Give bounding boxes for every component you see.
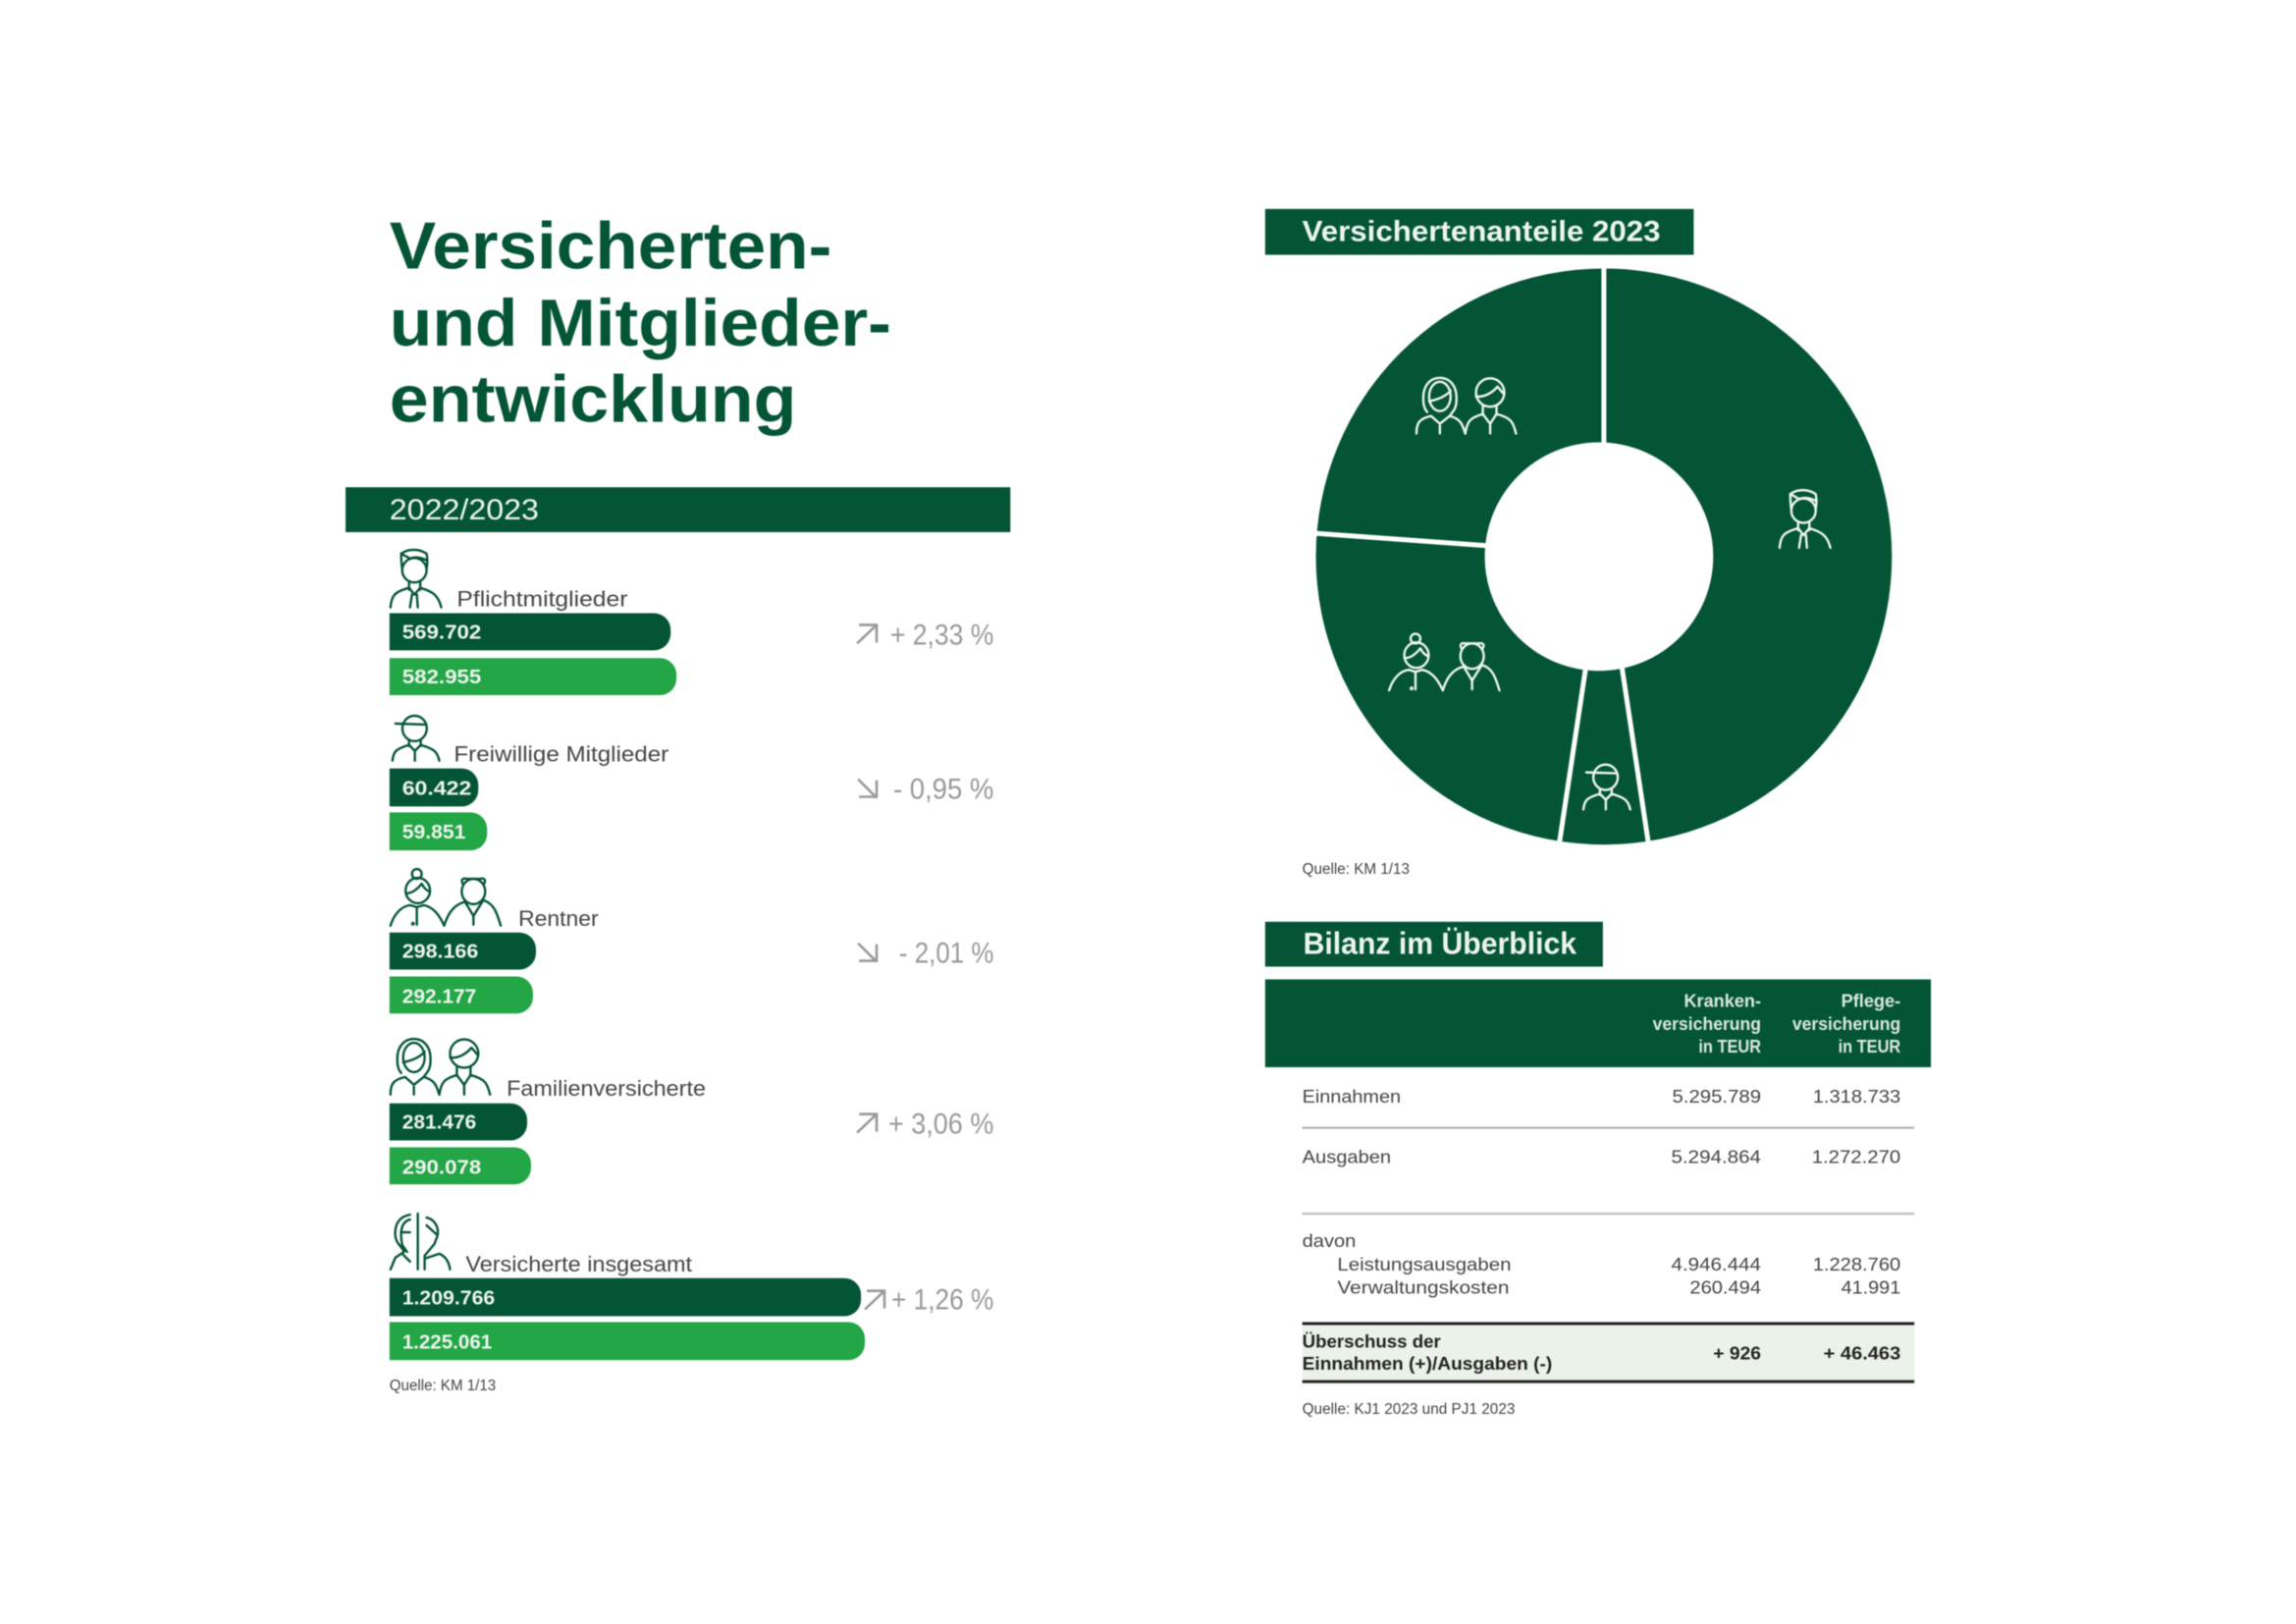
panel: Freiwillige Mitglieder: 59.851 <box>402 822 465 843</box>
table: balance overview <box>1265 979 1931 1381</box>
row: Einnahmen: 1.318.733 <box>1813 1087 1900 1108</box>
row: davon: 41.991 <box>1842 1278 1900 1299</box>
row: Ausgaben: 1.272.270 <box>1812 1147 1900 1167</box>
panel: Freiwillige Mitglieder <box>390 716 993 850</box>
icon: pensioners in donut <box>1389 633 1500 690</box>
row: Einnahmen: Einnahmen <box>1303 1087 1401 1108</box>
icon: family insured in donut <box>1416 378 1516 434</box>
icon: compulsory member in donut <box>1780 490 1831 548</box>
source note left: Quelle: KM 1/13 <box>390 1378 496 1394</box>
row: Überschuss <box>1303 1324 1914 1381</box>
row: Ausgaben <box>1303 1147 1900 1167</box>
panel: Rentner: - 2,01 % <box>899 938 993 970</box>
row: davon: 260.494 <box>1689 1278 1761 1299</box>
table header <box>1265 979 1931 1067</box>
panel: Pflichtmitglieder: 569.702 <box>402 622 481 643</box>
icon: pensioners <box>391 869 501 926</box>
panel: Versicherte insgesamt: 1.209.766 <box>402 1288 495 1310</box>
source note donut: Quelle: KM 1/13 <box>1303 861 1410 878</box>
row: davon: davon <box>1303 1231 1356 1252</box>
icon: compulsory member <box>391 550 442 608</box>
table header: in TEUR <box>1839 1037 1901 1057</box>
icon: voluntary member in donut <box>1583 765 1630 809</box>
table header: versicherung <box>1653 1014 1761 1035</box>
panel: year header 2022/2023: 2022/2023 <box>390 494 539 526</box>
row: davon <box>1303 1231 1900 1299</box>
row: davon: Verwaltungskosten <box>1337 1278 1509 1299</box>
row: Überschuss: Überschuss der <box>1303 1331 1441 1352</box>
panel: Pflichtmitglieder: Pflichtmitglieder <box>456 587 627 612</box>
icon: voluntary member <box>393 716 440 761</box>
row: Überschuss: + 926 <box>1713 1343 1761 1364</box>
panel: Rentner: 298.166 <box>402 942 478 963</box>
source note table: Quelle: KJ1 2023 und PJ1 2023 <box>1303 1401 1516 1418</box>
panel: year header 2022/2023 <box>346 487 1010 532</box>
title: entwicklung <box>390 363 796 437</box>
table header: in TEUR <box>1698 1037 1761 1057</box>
panel: Versicherte insgesamt: + 1,26 % <box>891 1284 993 1317</box>
heading: Bilanz im Überblick <box>1265 922 1603 967</box>
row: Überschuss: Einnahmen (+)/Ausgaben (-) <box>1303 1354 1552 1375</box>
panel: Versicherte insgesamt <box>390 1214 993 1360</box>
row: Einnahmen <box>1303 1087 1900 1108</box>
panel: Rentner: Rentner <box>518 906 599 931</box>
panel: Versicherte insgesamt: 1.225.061 <box>402 1331 492 1353</box>
panel: Familienversicherte: 290.078 <box>402 1157 481 1178</box>
row: davon: 1.228.760 <box>1813 1255 1900 1275</box>
title: Versicherten- <box>390 209 831 283</box>
panel: Familienversicherte: + 3,06 % <box>888 1109 993 1141</box>
row: Ausgaben: 5.294.864 <box>1672 1147 1761 1167</box>
panel: Familienversicherte <box>390 1039 993 1184</box>
icon: family insured <box>391 1039 490 1095</box>
row: davon: Leistungsausgaben <box>1337 1255 1511 1275</box>
row: Überschuss: + 46.463 <box>1824 1343 1900 1364</box>
panel: Familienversicherte: 281.476 <box>402 1112 476 1134</box>
panel: Pflichtmitglieder <box>390 550 993 695</box>
donut chart <box>1313 264 1892 845</box>
heading: Versichertenanteile 2023 <box>1265 209 1693 255</box>
icon: all insured <box>391 1214 450 1270</box>
heading: Bilanz im Überblick: Bilanz im Überblick <box>1304 926 1576 961</box>
row: Ausgaben: Ausgaben <box>1303 1147 1391 1167</box>
panel: Pflichtmitglieder: 582.955 <box>402 667 481 688</box>
table header: versicherung <box>1792 1014 1900 1035</box>
heading: Versichertenanteile 2023: Versichertenanteile 2023 <box>1303 216 1661 248</box>
panel: Rentner <box>390 869 993 1013</box>
panel: Rentner: 292.177 <box>402 986 476 1007</box>
panel: Freiwillige Mitglieder: 60.422 <box>402 778 471 799</box>
title <box>390 209 891 437</box>
panel: Familienversicherte: Familienversicherte <box>507 1076 706 1101</box>
row: Einnahmen: 5.295.789 <box>1673 1087 1761 1108</box>
table header: Pflege- <box>1842 991 1900 1011</box>
row: davon: 4.946.444 <box>1672 1255 1761 1275</box>
table header: Kranken- <box>1683 991 1761 1011</box>
panel: Versicherte insgesamt: Versicherte insgesamt <box>465 1252 692 1276</box>
panel: Freiwillige Mitglieder: Freiwillige Mitglieder <box>454 742 668 767</box>
panel: Freiwillige Mitglieder: - 0,95 % <box>893 773 993 805</box>
panel: Pflichtmitglieder: + 2,33 % <box>890 619 993 651</box>
title: und Mitglieder- <box>390 287 891 360</box>
